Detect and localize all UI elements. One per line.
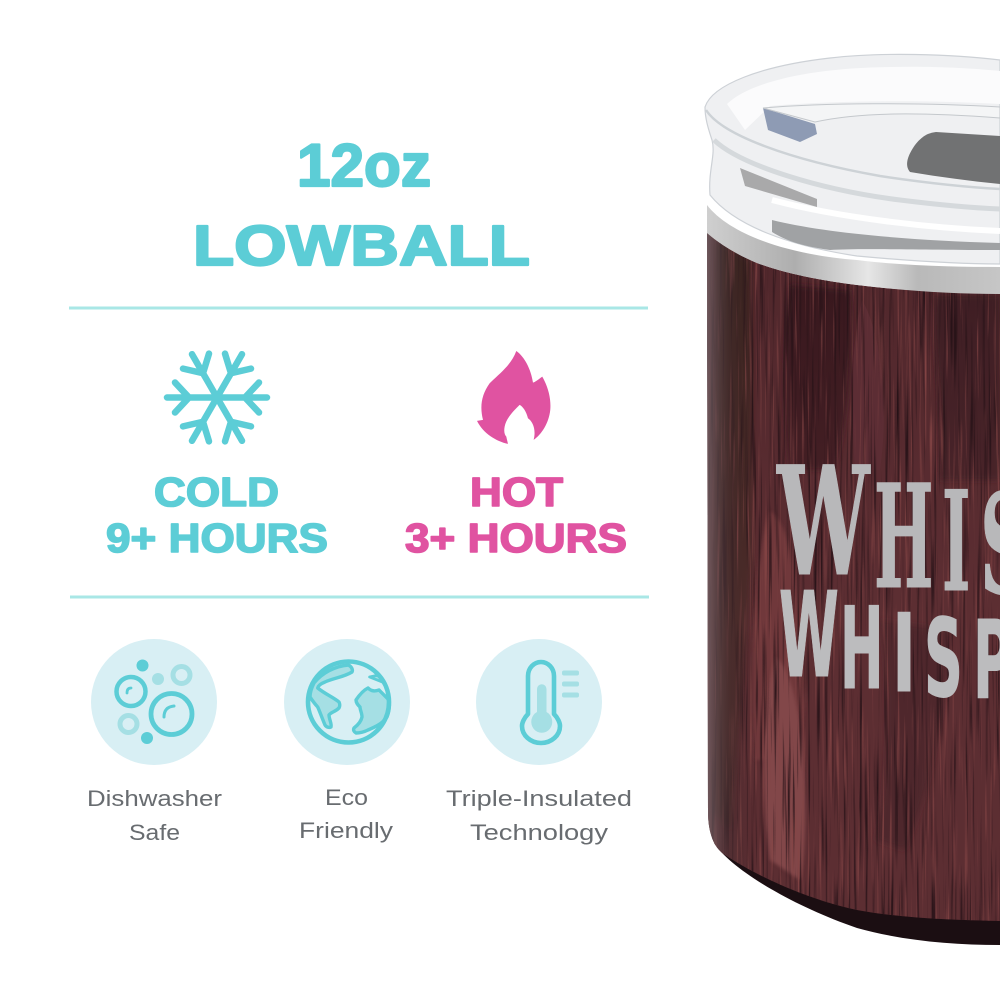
engraved text: whisper: S xyxy=(924,597,963,723)
label: dishwasher safe xyxy=(87,786,222,845)
label: triple insulated: Technology xyxy=(470,820,608,845)
cold label xyxy=(106,469,328,561)
wood body xyxy=(700,225,1000,935)
drink opening tab xyxy=(763,108,817,142)
engraved text: whiskey: W xyxy=(776,433,871,610)
hot label xyxy=(405,469,627,561)
label: dishwasher safe: Dishwasher xyxy=(87,786,222,811)
label: eco friendly: Eco xyxy=(325,785,368,810)
engraved text: whisper xyxy=(779,567,1000,725)
panel: hot rating xyxy=(405,351,627,561)
label: eco friendly: Friendly xyxy=(299,818,393,843)
panel: cold rating xyxy=(106,347,328,561)
engraved text: whiskey: H xyxy=(874,454,933,622)
engraved text: whiskey xyxy=(776,433,1000,626)
title: 12oz xyxy=(297,132,431,199)
panel: triple insulated xyxy=(446,639,632,845)
black base xyxy=(714,843,1000,945)
engraved text: whisper: H xyxy=(840,583,884,715)
label: eco friendly xyxy=(299,785,393,843)
label: triple insulated: Triple-Insulated xyxy=(446,786,632,811)
hot label: 3+ HOURS xyxy=(405,515,627,561)
hot label: HOT xyxy=(470,469,563,515)
cold label: 9+ HOURS xyxy=(106,515,328,561)
panel: dishwasher safe xyxy=(87,639,222,845)
cold label: COLD xyxy=(154,469,279,515)
engraved text: whisper: I xyxy=(892,592,916,718)
grey slider xyxy=(907,132,1000,184)
product photo: lowball tumbler xyxy=(700,54,1000,945)
label: triple insulated xyxy=(446,786,632,845)
title xyxy=(193,132,530,278)
engraved text: whisper: W xyxy=(779,567,839,704)
icon: flame xyxy=(477,351,550,444)
engraved text: whiskey: I xyxy=(942,462,970,624)
bottom divider xyxy=(70,596,649,598)
icon: globe xyxy=(284,639,410,765)
clear lid xyxy=(705,54,1000,264)
grey lid reflections xyxy=(740,168,817,207)
silver rim band xyxy=(707,205,1000,294)
title: LOWBALL xyxy=(193,214,530,278)
icon: bubbles xyxy=(91,639,217,765)
icon: snowflake xyxy=(167,347,267,448)
label: dishwasher safe: Safe xyxy=(129,820,180,845)
icon: thermometer xyxy=(476,639,602,765)
top divider xyxy=(69,306,648,310)
panel: eco friendly xyxy=(284,639,410,843)
